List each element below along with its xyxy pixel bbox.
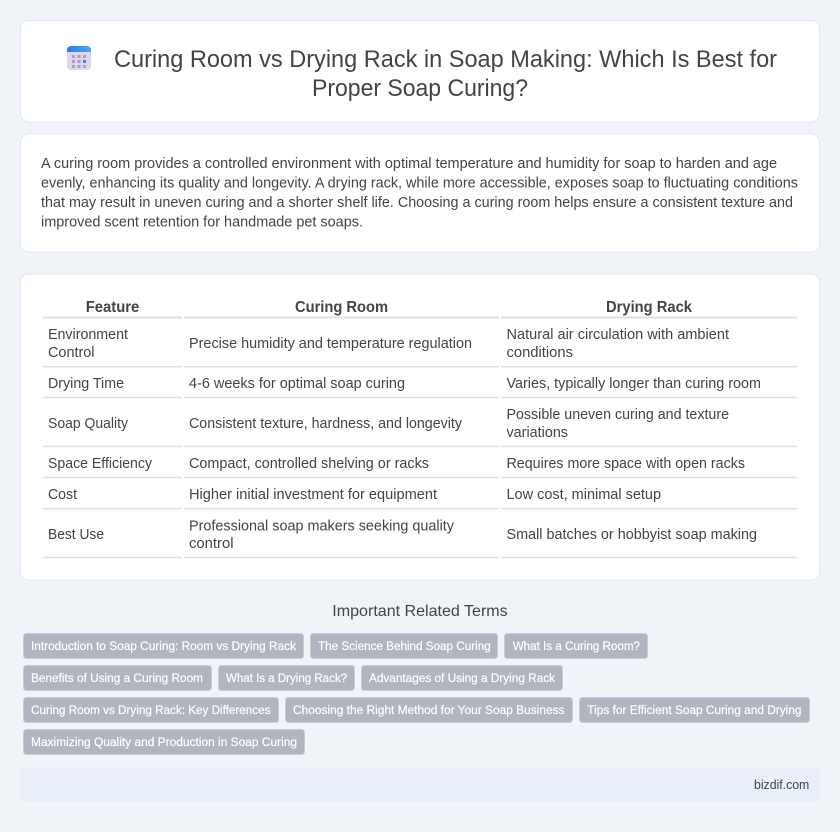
- tag: [24, 666, 212, 690]
- tag: [218, 666, 354, 690]
- table header: Feature: [86, 299, 140, 316]
- row: soap quality: Consistent texture, hardness, and longevity: [189, 416, 463, 432]
- tag: [286, 698, 572, 722]
- row: space efficiency: Space Efficiency: [48, 456, 153, 472]
- row: best use: control: [189, 536, 234, 552]
- heading: important related terms: Important Related Terms: [332, 603, 508, 620]
- row: drying time: Drying Time: [48, 376, 124, 392]
- row: drying time: [43, 376, 797, 398]
- row: soap quality: Possible uneven curing and texture: [506, 407, 729, 423]
- icon: calendar: [67, 46, 91, 70]
- tag: Introduction to Soap Curing: Room vs Drying Rack: [31, 639, 297, 653]
- row: environment control: Precise humidity and temperature regulation: [189, 336, 472, 352]
- row: best use: Professional soap makers seeking quality: [189, 518, 455, 534]
- footer band: [20, 768, 820, 802]
- footer site name: bizdif.com: [754, 777, 809, 792]
- row: soap quality: [43, 407, 797, 447]
- tag: Advantages of Using a Drying Rack: [369, 671, 556, 685]
- row: environment control: Natural air circulation with ambient: [506, 327, 729, 343]
- row: soap quality: Soap Quality: [48, 416, 129, 432]
- row: environment control: Control: [48, 345, 94, 361]
- panel: related term tags: [24, 634, 810, 754]
- row: cost: Low cost, minimal setup: [506, 487, 661, 503]
- row: best use: [43, 518, 797, 558]
- row: space efficiency: Compact, controlled shelving or racks: [189, 456, 429, 472]
- table header: [43, 299, 797, 318]
- row: drying time: Varies, typically longer than curing room: [506, 376, 761, 392]
- tag: [310, 634, 498, 658]
- row: environment control: [43, 327, 797, 368]
- table header: Curing Room: [295, 299, 388, 316]
- tag: [504, 634, 648, 658]
- tag: Benefits of Using a Curing Room: [31, 671, 203, 685]
- tag: The Science Behind Soap Curing: [318, 639, 491, 653]
- tag: Tips for Efficient Soap Curing and Drying: [587, 703, 802, 717]
- tag: Maximizing Quality and Production in Soap Curing: [31, 735, 297, 749]
- row: best use: Small batches or hobbyist soap making: [506, 527, 757, 543]
- tag: [24, 634, 304, 658]
- tag: [362, 666, 562, 690]
- row: cost: Higher initial investment for equipment: [189, 487, 437, 503]
- tag: [24, 698, 278, 722]
- panel: title header: [20, 20, 820, 122]
- tag: What Is a Drying Rack?: [226, 671, 347, 685]
- table header: Drying Rack: [606, 299, 692, 316]
- intro paragraph: that may result in uneven curing and a shorter shelf life. Choosing a curing room helps ensure a consistent texture and: [41, 195, 793, 211]
- row: environment control: Environment: [48, 327, 128, 343]
- row: drying time: 4-6 weeks for optimal soap curing: [189, 376, 405, 392]
- tag: What Is a Curing Room?: [513, 639, 640, 653]
- tag: [580, 698, 810, 722]
- intro paragraph: A curing room provides a controlled environment with optimal temperature and humidity for soap to harden and age: [41, 156, 777, 172]
- row: space efficiency: Requires more space with open racks: [506, 456, 745, 472]
- row: cost: Cost: [48, 487, 77, 503]
- row: environment control: conditions: [506, 345, 573, 361]
- row: space efficiency: [43, 456, 797, 478]
- title: Proper Soap Curing?: [312, 75, 528, 102]
- row: soap quality: variations: [506, 425, 568, 441]
- intro paragraph: improved scent retention for handmade pet soaps.: [41, 214, 363, 230]
- row: cost: [43, 487, 797, 510]
- tag: Choosing the Right Method for Your Soap Business: [293, 703, 564, 717]
- panel: introduction text: [20, 134, 820, 252]
- title: [114, 46, 777, 102]
- intro paragraph: evenly, enhancing its quality and longevity. A drying rack, while more accessible, exposes soap to fluctuating conditions: [41, 176, 798, 192]
- tag: [24, 730, 304, 754]
- title: Curing Room vs Drying Rack in Soap Making: Which Is Best for: [114, 46, 777, 73]
- row: best use: Best Use: [48, 527, 104, 543]
- panel: comparison table: [20, 274, 820, 580]
- intro paragraph: [41, 156, 798, 230]
- tag: Curing Room vs Drying Rack: Key Differences: [31, 703, 270, 717]
